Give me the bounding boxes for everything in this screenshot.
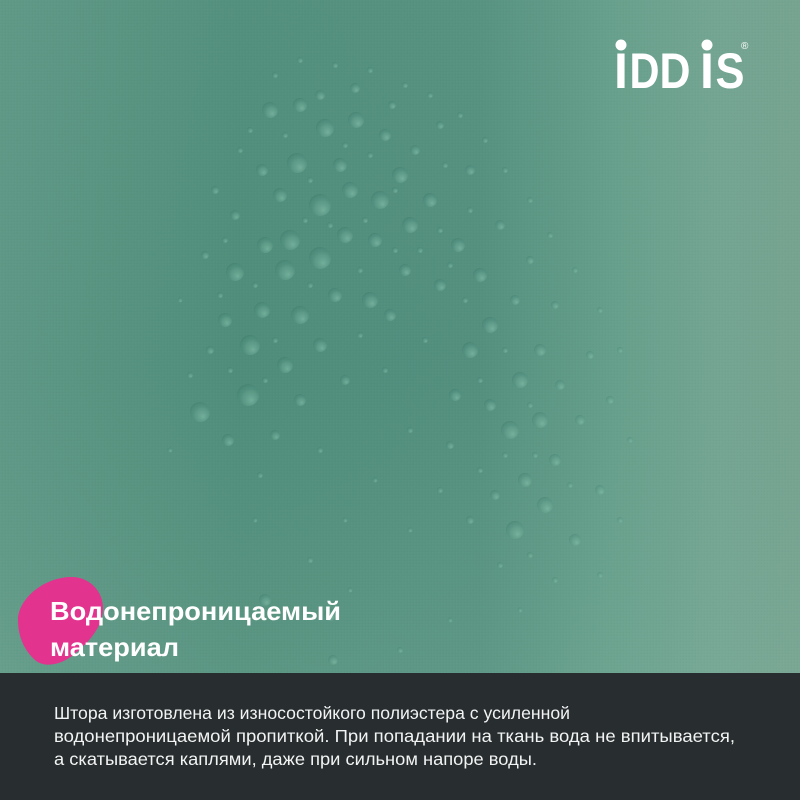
logo: IDDIS: ® xyxy=(741,41,749,52)
logo: IDDIS: D xyxy=(630,43,660,99)
heading xyxy=(50,596,341,662)
water drops on the fabric xyxy=(168,57,633,665)
logo: IDDIS: D xyxy=(660,43,690,99)
description text: Штора изготовлена из износостойкого полиэстера с усиленной xyxy=(54,703,570,723)
pink accent blob xyxy=(18,577,103,665)
description text xyxy=(54,703,735,769)
logo: IDDIS: S xyxy=(716,43,744,99)
logo: IDDIS: I xyxy=(700,43,714,99)
logo: IDDIS xyxy=(614,40,749,99)
heading: материал xyxy=(50,632,179,662)
description text: водонепроницаемой пропиткой. При попадании на ткань вода не впитывается, xyxy=(54,726,735,746)
bottom dark panel xyxy=(0,673,800,800)
logo: IDDIS: I xyxy=(614,43,628,99)
heading: Водонепроницаемый xyxy=(50,596,341,626)
description text: а скатывается каплями, даже при сильном напоре воды. xyxy=(54,749,537,769)
